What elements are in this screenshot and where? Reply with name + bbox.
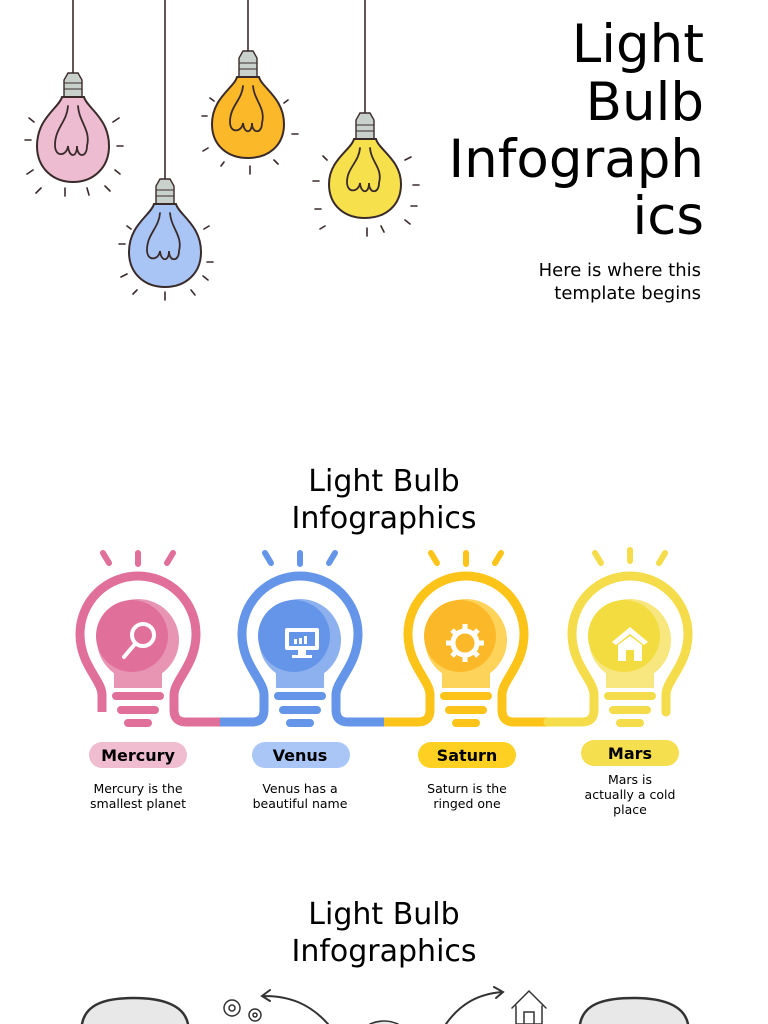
- section title: Infographics: [291, 501, 477, 536]
- main title: Infograph: [449, 129, 704, 190]
- hanging bulbs: [25, 0, 419, 300]
- second section title: [291, 897, 477, 969]
- pill: Mars: Mars: [608, 744, 652, 763]
- bulb: orange: [202, 0, 298, 174]
- descriptions: Mercury is the: [93, 781, 183, 796]
- pill: Mercury: Mercury: [101, 746, 176, 765]
- icon: house: [512, 991, 546, 1024]
- bulb: blue: [119, 0, 213, 300]
- icon: gear: [446, 624, 484, 662]
- pill: Saturn: [418, 742, 516, 768]
- pill: Mercury: [89, 742, 187, 768]
- descriptions: place: [613, 802, 647, 817]
- bulb: Mars: [548, 550, 688, 723]
- descriptions: beautiful name: [253, 796, 348, 811]
- subtitle: Here is where this: [539, 260, 701, 281]
- bulb chain: [80, 550, 688, 723]
- bottom sketch: [82, 987, 688, 1024]
- second section title: Light Bulb: [308, 897, 460, 932]
- bulb: Venus: [220, 553, 384, 723]
- second section title: Infographics: [291, 934, 477, 969]
- icon: gears: [224, 1000, 261, 1021]
- bulb: pink: [25, 0, 123, 196]
- subtitle: [539, 260, 701, 304]
- descriptions: Mars is: [608, 772, 652, 787]
- descriptions: Venus has a: [262, 781, 338, 796]
- pill: Saturn: Saturn: [437, 746, 497, 765]
- icon: magnifier: [124, 624, 154, 657]
- descriptions: smallest planet: [90, 796, 186, 811]
- main title: Light: [572, 14, 704, 75]
- sketch bulbs: [82, 998, 688, 1024]
- bulb: Saturn: [384, 553, 548, 723]
- descriptions: actually a cold: [585, 787, 675, 802]
- main title: Bulb: [586, 72, 704, 133]
- bulb: yellow: [313, 0, 419, 236]
- icon: monitor: [285, 628, 319, 658]
- bulb: Mercury: [80, 553, 220, 723]
- main title: [449, 14, 704, 247]
- pill: Mars: [581, 740, 679, 766]
- descriptions: [90, 772, 675, 817]
- descriptions: ringed one: [433, 796, 501, 811]
- pill: Venus: Venus: [273, 746, 327, 765]
- section title: Light Bulb: [308, 464, 460, 499]
- labels: [89, 740, 679, 768]
- subtitle: template begins: [554, 283, 701, 304]
- section title: [291, 464, 477, 536]
- arrows: [262, 987, 503, 1024]
- pill: Venus: [252, 742, 350, 768]
- main title: ics: [633, 186, 704, 247]
- descriptions: Saturn is the: [427, 781, 507, 796]
- icon: house: [612, 627, 648, 661]
